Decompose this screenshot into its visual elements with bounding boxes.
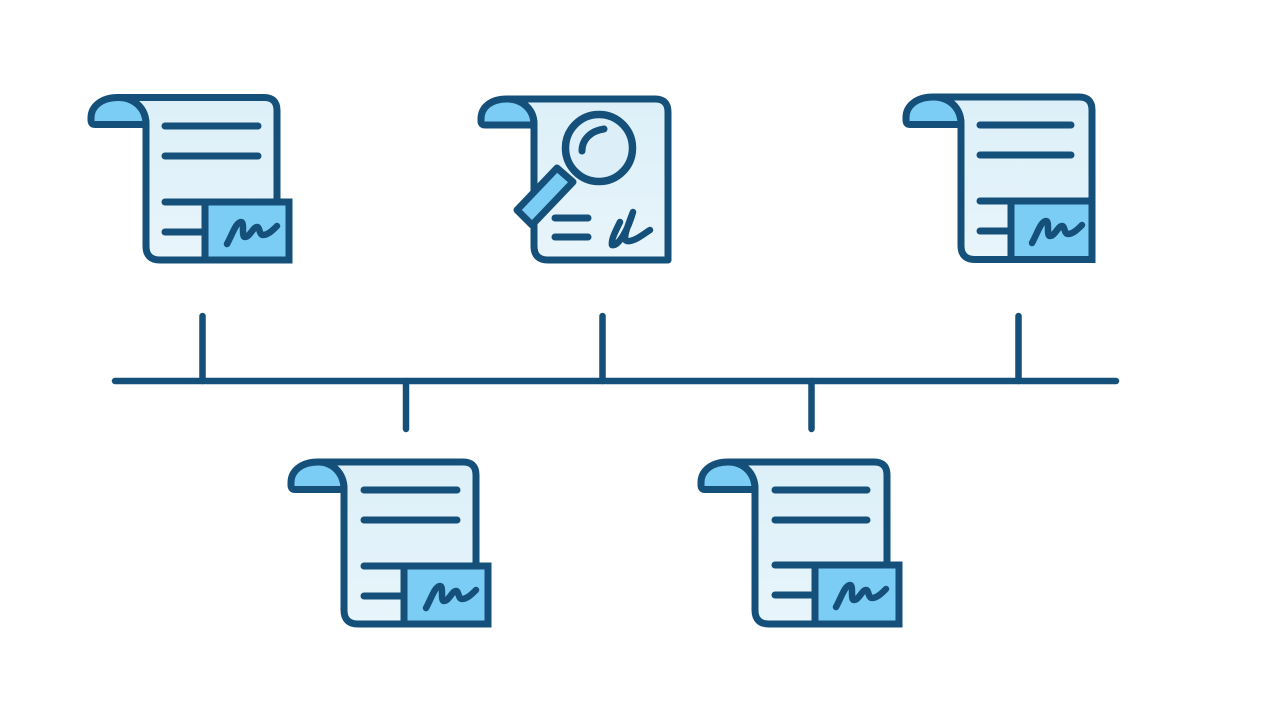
upper tick 2 (599, 316, 606, 381)
icon: signed document 4 (701, 462, 899, 624)
lower tick 1 (403, 381, 409, 429)
icon: signed document 3 (906, 97, 1092, 260)
magnifier lens (566, 114, 632, 182)
upper tick 1 (199, 316, 206, 381)
lower tick 2 (808, 381, 815, 429)
upper tick 3 (1015, 316, 1022, 381)
icon: document with magnifying glass (481, 99, 668, 260)
icon: signed document 2 (291, 462, 488, 624)
magnifier handle (517, 168, 573, 225)
timeline axis (115, 316, 1116, 429)
icon: signed document 1 (91, 98, 289, 260)
